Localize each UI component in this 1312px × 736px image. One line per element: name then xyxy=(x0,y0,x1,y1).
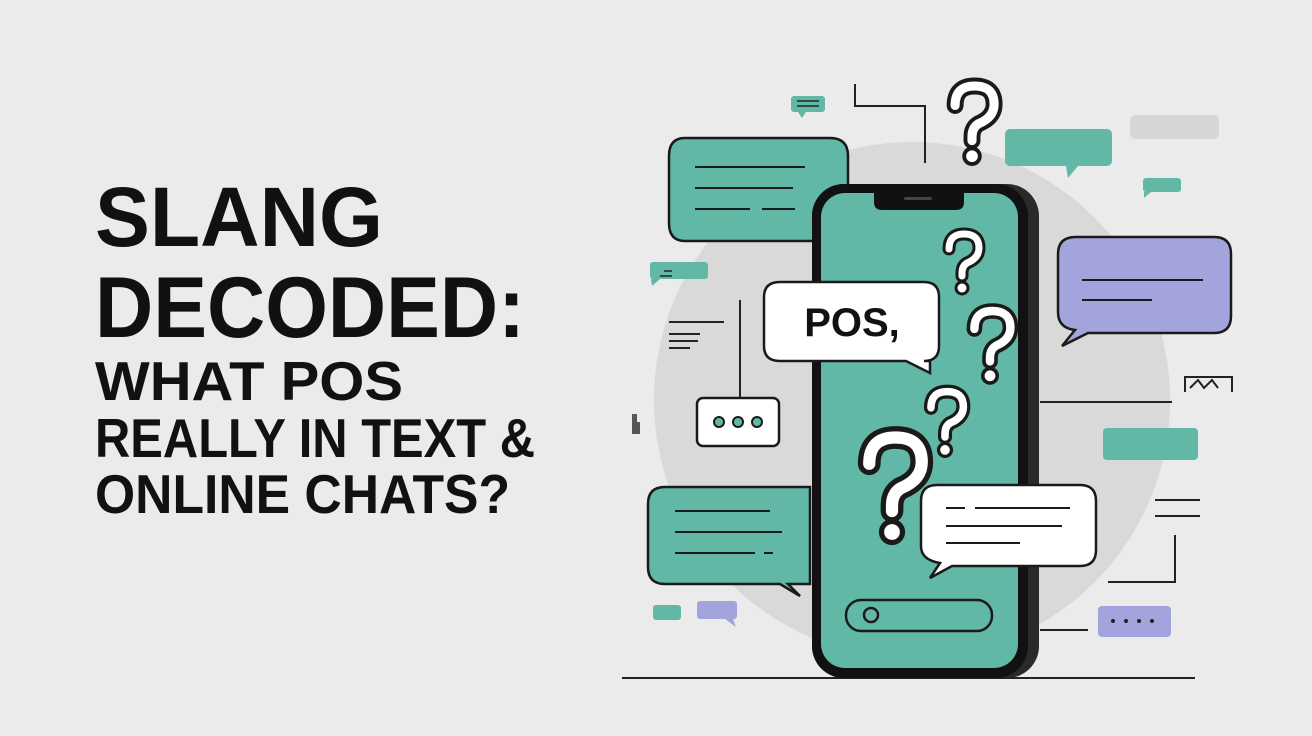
title xyxy=(95,170,535,525)
connector lines xyxy=(669,84,1232,630)
title: REALLY IN TEXT & xyxy=(95,407,535,469)
dots box xyxy=(697,398,779,446)
bubble: bottom left green xyxy=(648,487,810,596)
phone xyxy=(812,184,1039,678)
title: DECODED: xyxy=(95,260,525,356)
title: SLANG xyxy=(95,170,383,264)
title: WHAT POS xyxy=(95,350,403,412)
bubble: bottom white xyxy=(921,485,1096,578)
bubble: top left green xyxy=(669,138,848,241)
bubble: POS xyxy=(764,282,939,373)
background circle xyxy=(654,142,1170,658)
bubble: POS: POS, xyxy=(804,301,900,345)
top right shapes xyxy=(1005,115,1219,637)
small icons left xyxy=(632,96,825,627)
title: ONLINE CHATS? xyxy=(95,463,510,525)
question marks xyxy=(869,86,1010,545)
bubble: purple xyxy=(1058,237,1231,346)
baseline xyxy=(622,677,1195,679)
search bar xyxy=(846,600,992,631)
